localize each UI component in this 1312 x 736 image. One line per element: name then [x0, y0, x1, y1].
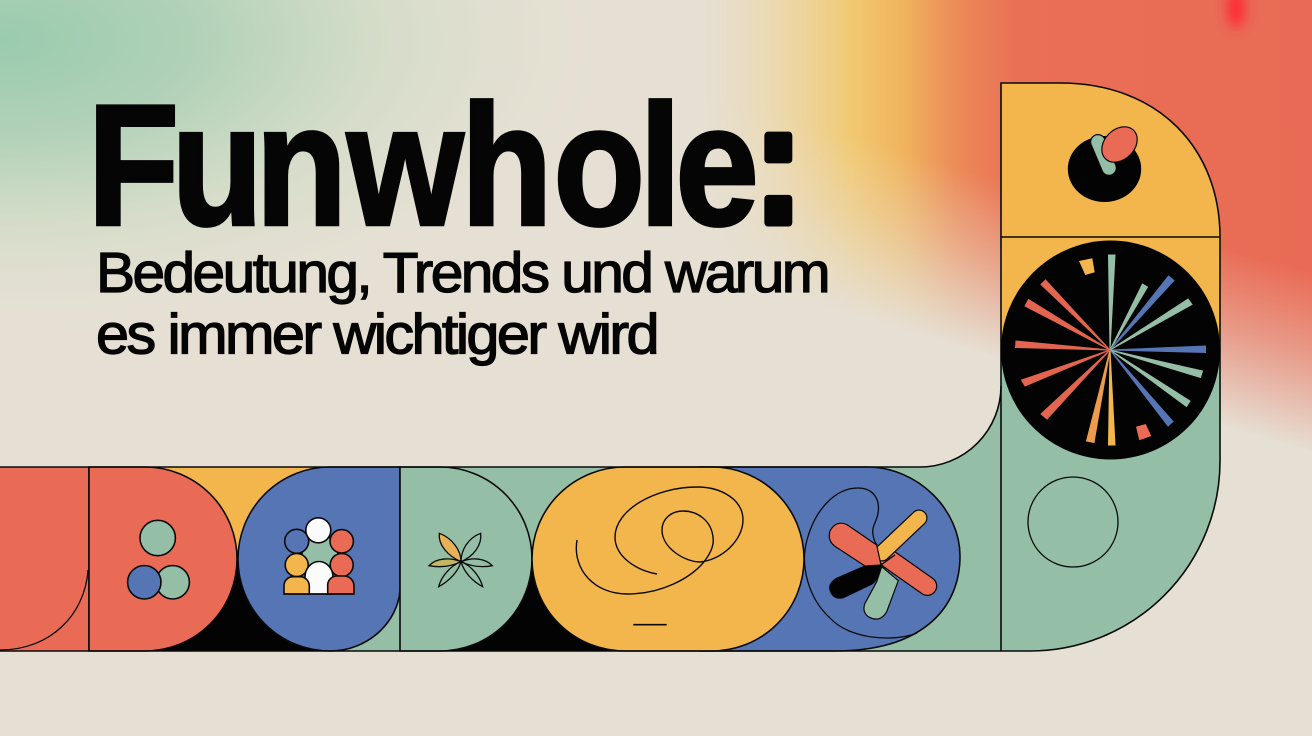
icon: group of people [284, 518, 354, 594]
segment: red quarter panel [0, 467, 89, 651]
band base: yellow and black sections [145, 467, 1001, 651]
square marker: red [1136, 424, 1151, 440]
small dash [633, 624, 667, 626]
spokes: green and blue upper right [1108, 255, 1206, 426]
segment: green panel with leaf [400, 467, 532, 651]
spokes: yellow, orange and red [1016, 280, 1115, 445]
segment: yellow top panel [1001, 83, 1220, 350]
background gradient [0, 0, 1312, 444]
icon: outlined loop circle [805, 488, 917, 638]
square marker: yellow [1079, 258, 1095, 275]
radial chart [1001, 240, 1220, 460]
segment: blue panel with X icon [700, 467, 960, 651]
icon: black circle with pill and ellipse [1068, 120, 1144, 202]
title: Funwhole [88, 70, 759, 262]
icon: three circles [128, 520, 189, 599]
segment: red D panel with circles [89, 467, 237, 651]
segment: yellow rounded panel with spiral [532, 467, 804, 651]
icon: crossed pills [829, 518, 927, 619]
subtitle: es immer wichtiger wird [96, 302, 657, 366]
icon: outline circle [1028, 477, 1118, 567]
title: : [753, 68, 803, 260]
segment: green vertical panel with L-curve [0, 350, 1220, 651]
subtitle [96, 241, 828, 366]
icon: leaf [429, 533, 492, 587]
subtitle: Bedeutung, Trends und warum [96, 241, 828, 305]
winding band [0, 83, 1220, 651]
segment: blue panel with people [238, 467, 400, 651]
icon: spiral line [576, 487, 743, 594]
